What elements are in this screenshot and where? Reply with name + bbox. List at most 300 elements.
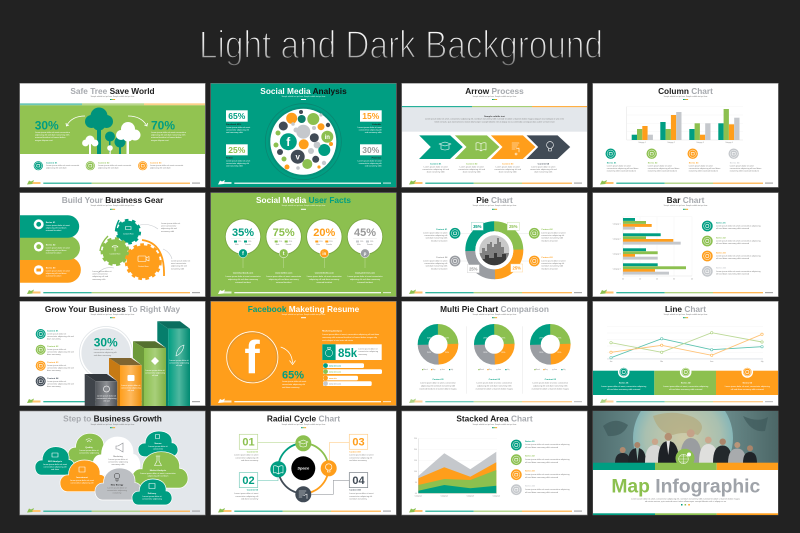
arrow captions: consectetur adipiscing elit sed xyxy=(458,168,485,171)
arrow captions: diam nonummy nibh xyxy=(427,172,445,174)
side contents: Lorem ipsum dolor sit amet xyxy=(541,259,566,262)
cover title: Map Infographic xyxy=(611,476,761,497)
3d column: green: consectetur adipiscing xyxy=(145,372,165,374)
series legend: Series 02 xyxy=(648,162,658,164)
slide: Social Media User Facts: Sample subtitle text put here. Sample subtitle text put here xyxy=(282,204,325,207)
column chart: Category 4 xyxy=(725,141,733,144)
marketing analysis text: nonummy nibh euismod tincidunt ut laoreet dolore magna aliq xyxy=(322,336,377,339)
title: Light and Dark Background xyxy=(199,24,603,67)
stacked area chart: 5.0 xyxy=(415,482,417,484)
3d column: teal: elit sed xyxy=(176,364,182,367)
slide: Bar Chart: Sample subtitle text put here. Sample subtitle text put here xyxy=(664,204,707,207)
series legend: elit sed diam nonummy nibh euismod xyxy=(525,491,558,494)
list items: Content 03 xyxy=(47,361,59,364)
gear arcs xyxy=(100,220,164,276)
cloud: Marketing: nonummy nibh xyxy=(111,464,125,466)
line chart: Jan xyxy=(610,361,612,363)
slide: Pie Chart xyxy=(402,193,587,297)
fact: 75%: 25% xyxy=(279,241,283,243)
donut 1 xyxy=(419,329,458,391)
side contents: consectetur adipiscing elit xyxy=(541,262,565,265)
stat: 65% xyxy=(226,110,251,134)
series legend: Lorem ipsum dolor sit amet consectetur adipiscing xyxy=(716,224,760,228)
fact: 35%: adipiscing elit sed diam nonummy xyxy=(228,278,258,281)
series legend: Lorem ipsum dolor sit amet consectetur adipiscing xyxy=(716,240,760,242)
donut 3: March xyxy=(536,368,540,371)
cover subtitle: Lorem ipsum dolor sit amet, consectetur adipiscing elit, sed diam nonummy nibh euismod tincidunt ut laoreet dolore magna xyxy=(631,498,741,501)
item 01: Lorem ipsum dolor sit amet xyxy=(234,454,259,456)
bar chart: 4.0 xyxy=(691,278,693,280)
stacked area chart: 0.0 xyxy=(415,493,417,495)
series legend: elit sed diam nonummy nibh euismod xyxy=(525,446,558,449)
gear captions: Lorem ipsum dolor sit xyxy=(161,222,181,225)
fact: 75%: adipiscing elit sed diam nonummy xyxy=(269,278,299,281)
stat: 15%: LinkedIn xyxy=(372,124,382,126)
arrow captions: Content 04 xyxy=(538,162,550,166)
donut 3: July xyxy=(563,369,566,371)
series legend xyxy=(606,148,762,172)
stat: 15%: consectetur adipiscing elit xyxy=(359,128,382,131)
fact: 20%: www.linkedin.com xyxy=(315,272,334,274)
green panel with trees: Lorem ipsum dolor sit amet consectetur xyxy=(35,131,70,134)
arrow captions: Content 03 xyxy=(502,162,514,166)
item 04 xyxy=(349,473,374,500)
color bands xyxy=(593,463,778,515)
left stacked bands: Lorem ipsum dolor sit amet xyxy=(46,246,70,250)
fact: 45%: www.pinterest.com xyxy=(355,272,375,274)
donut 3: Lorem ipsum dolor sit amet, consectetur xyxy=(533,382,568,385)
cycle ring xyxy=(270,435,337,502)
icon: trees xyxy=(82,108,140,154)
item 02 xyxy=(234,473,259,500)
photo: globe and business people xyxy=(593,411,778,463)
slide: Stacked Area Chart xyxy=(402,411,587,515)
contents row: adipiscing elit sed diam xyxy=(150,167,171,170)
donut 2: 20% xyxy=(483,352,488,354)
gray text band: Lorem ipsum dolor sit amet, consectetur adipiscing elit, sed diam nonummy nibh euismod tincidunt ut laoreet dolore magna aliquam erat volutpat ut wisi enim xyxy=(425,118,564,120)
85k box xyxy=(322,344,382,360)
marketing analysis text: Marketing Analysis xyxy=(322,330,343,332)
stat: 65%: 65% xyxy=(228,111,246,121)
gears xyxy=(102,220,160,279)
list items xyxy=(36,329,74,388)
heading: Line Chart xyxy=(665,304,706,314)
fact: 75%: Male xyxy=(276,244,279,246)
series legend: elit sed diam nonummy nibh euismod xyxy=(525,461,558,464)
donut 3 xyxy=(532,329,570,391)
bar chart: Category 2 xyxy=(613,238,621,240)
series legend: Lorem ipsum dolor sit amet consectetur adipiscing xyxy=(525,488,569,491)
column chart: Category 1 xyxy=(638,141,646,144)
progress bars: www.site.com xyxy=(329,382,341,385)
stat: 25%: sed nonummy nibh xyxy=(226,165,243,167)
3d column: green: Lorem ipsum dolor sit xyxy=(145,369,165,372)
series bands: Lorem ipsum dolor sit amet, consectetur adipiscing xyxy=(663,385,708,388)
gear captions: nonummy nibh xyxy=(161,231,174,233)
bar chart: 3.0 xyxy=(673,278,675,280)
donut 1: 20% xyxy=(445,338,449,340)
side contents: sed diam nonummy nibh xyxy=(541,238,563,240)
series legend: Series 03 xyxy=(716,252,726,254)
donut 3: Content 03 xyxy=(545,378,557,381)
cloud: Market Analysis: Market Analysis xyxy=(150,469,167,472)
series bands: Series 02 xyxy=(681,382,691,384)
stat: 15%: Lorem ipsum dolor sit amet xyxy=(358,126,382,129)
item 04: 04 xyxy=(352,475,365,487)
item 01: sed diam nonummy xyxy=(241,460,258,462)
fact: 75% xyxy=(266,218,302,284)
cloud: Secure: Secure xyxy=(154,443,162,445)
series legend: Series 02 xyxy=(716,237,726,239)
side contents: Content 03 xyxy=(541,256,553,259)
bar chart: Category 1 xyxy=(613,222,621,226)
arrow captions: Content 02 xyxy=(466,162,478,166)
arrow captions: Lorem ipsum dolor sit amet xyxy=(496,165,520,168)
slide: Social Media Analysis: Sample subtitle text put here. Sample subtitle text put here xyxy=(282,95,325,98)
slide: Build Your Business Gear: Sample subtitle text put here. Sample subtitle text put here xyxy=(91,204,134,207)
item 03: sed diam nonummy xyxy=(349,460,367,462)
item 04: sed diam nonummy xyxy=(349,498,367,500)
left stacked bands: adipiscing elit sed diam xyxy=(46,272,67,275)
side contents: Content 01 xyxy=(436,228,448,231)
stat: 65%: Lorem ipsum dolor sit amet xyxy=(226,126,251,129)
left stacked bands: Series 03 xyxy=(46,268,56,270)
series bands: Series 01 xyxy=(619,382,629,384)
donut 3: 20% xyxy=(557,352,562,354)
stat: 25%: 25% xyxy=(228,145,246,155)
list items: Lorem ipsum dolor sit xyxy=(47,364,67,367)
donut 1: July xyxy=(450,369,453,371)
heading: Step to Business Growth xyxy=(63,414,162,424)
cloud: SEO Analysis: SEO Analysis xyxy=(48,460,63,463)
stat: 30%: sed nonummy nibh xyxy=(365,165,382,167)
donut 3: euismod tincidunt ut laoreet dolore magna xyxy=(532,388,570,391)
pie value tags: 25% xyxy=(469,266,478,271)
cloud: Investment xyxy=(60,460,107,492)
arrow chain xyxy=(418,135,571,159)
item 04: Content 04 xyxy=(349,489,361,492)
item 03: 03 xyxy=(352,437,365,449)
list items: Content 02 xyxy=(47,345,59,348)
fact: 20%: 20% xyxy=(313,227,336,239)
series legend: Lorem ipsum dolor sit amet xyxy=(607,164,631,167)
fact: 35%: f xyxy=(242,251,244,257)
series legend: elit sed diam nonummy nibh euismod xyxy=(716,227,749,230)
slide: Facebook Marketing Resume: Sample subtitle text put here. Sample subtitle text put here xyxy=(282,313,325,316)
side contents: consectetur adipiscing elit xyxy=(424,262,448,265)
series legend: Series 03 xyxy=(525,471,535,473)
contents row: adipiscing elit sed diam xyxy=(46,167,67,170)
arrow xyxy=(281,347,296,364)
gear captions: amet consectetur xyxy=(161,225,177,228)
pie value tags: 25% xyxy=(513,266,521,271)
slide: Grow Your Business To Right Way xyxy=(20,301,205,406)
cloud: Market Analysis: Lorem ipsum dolor sit amet, consectetur xyxy=(140,472,176,475)
fact: 35%: 25% xyxy=(238,241,242,243)
series legend: nonummy nibh euismod tincidunt xyxy=(648,169,677,172)
side contents: consectetur adipiscing elit xyxy=(424,234,448,237)
donut chart xyxy=(470,226,518,274)
cloud: SEO Analysis xyxy=(35,447,75,475)
green panel with trees xyxy=(20,105,205,154)
side contents: Lorem ipsum dolor sit amet xyxy=(423,259,448,262)
slide: Grow Your Business To Right Way: Sample subtitle text put here. Sample subtitle text put here xyxy=(91,313,134,316)
donut 2: Content 02 xyxy=(489,378,501,381)
left stacked bands: euismod tincidunt xyxy=(46,274,62,278)
bubble chart xyxy=(265,104,341,180)
cloud: Market Analysis: adipiscing elit sed diam xyxy=(148,474,169,478)
cover subtitle: ad minim veniam, quis nostrud exerci tation ullamcorper suscipit lobortis nisl ut aliquip ex ea xyxy=(645,500,727,503)
bubble chart: in xyxy=(325,135,330,141)
fact: 45%: Female xyxy=(367,244,373,246)
marketing analysis text xyxy=(322,330,379,342)
85k box: consectetur adipiscing xyxy=(358,350,378,353)
fact: 20% xyxy=(306,218,342,284)
heading: Social Media User Facts xyxy=(256,195,351,205)
3d column: orange: elit sed xyxy=(128,389,134,392)
3d column: green xyxy=(133,341,166,406)
3d column: orange xyxy=(109,358,142,406)
marketing analysis text: erat volutpat ut wisi enim ad minim xyxy=(322,339,353,342)
series bands: Lorem ipsum dolor sit amet, consectetur adipiscing xyxy=(725,385,770,388)
bubble chart: f xyxy=(286,135,291,149)
stacked area chart: 20.0 xyxy=(414,449,417,451)
slide: Pie Chart: Sample subtitle text put here. Sample subtitle text put here xyxy=(473,204,516,207)
donut 2: March xyxy=(480,368,484,371)
arrow captions: diam nonummy nibh xyxy=(463,172,481,174)
green panel with trees: euismod tincidunt ut laoreet dolore xyxy=(35,136,66,139)
30% circle: Lorem ipsum dolor sit xyxy=(94,348,113,351)
fact: 45%: adipiscing elit sed diam nonummy xyxy=(350,278,380,281)
arrow captions: Lorem ipsum dolor sit amet xyxy=(460,165,484,168)
cloud: Quality: Lorem ipsum dolor sit xyxy=(79,449,99,452)
85k box: 85k xyxy=(338,348,358,360)
left stacked bands: Series 01 xyxy=(46,222,56,224)
slide: Line Chart: Sample subtitle text put here. Sample subtitle text put here xyxy=(664,313,707,316)
cloud: Investment: consectetur adipiscing elit xyxy=(71,482,94,484)
series legend: Lorem ipsum dolor sit amet consectetur adipiscing xyxy=(716,270,760,273)
fact: 20%: 25% xyxy=(319,241,323,243)
slide: Social Media Analysis xyxy=(211,83,396,187)
item 01: Content 01 xyxy=(247,450,259,453)
slide: Multi Pie Chart Comparison: Sample subtitle text put here. Sample subtitle text put here xyxy=(473,313,516,316)
series bands: elit sed diam nonummy nibh euismod xyxy=(731,388,764,391)
item 02: 02 xyxy=(242,475,255,487)
series legend: elit sed diam nonummy nibh euismod xyxy=(716,257,749,260)
gear captions: Lorem ipsum dolor sit xyxy=(171,260,191,262)
stat: 25%: Lorem ipsum dolor sit amet xyxy=(226,160,251,162)
gray text band: Sample subtitle text xyxy=(484,115,505,118)
stacked area chart: Category 2 xyxy=(441,494,448,498)
arrow captions: consectetur adipiscing elit sed xyxy=(530,168,557,171)
series bands: Lorem ipsum dolor sit amet, consectetur adipiscing xyxy=(601,385,646,388)
heading: Safe Tree Save World xyxy=(70,86,155,96)
green panel with trees: 30% xyxy=(35,118,59,132)
stat: 25%: Twitter xyxy=(226,156,233,159)
cloud: New Energy: consectetur adipiscing xyxy=(107,489,127,492)
list items: Lorem ipsum dolor sit xyxy=(47,348,67,351)
side contents: tincidunt ut laoreet xyxy=(541,239,558,242)
connector lines xyxy=(460,233,529,261)
pager dots xyxy=(681,504,690,506)
progress bars: www.site xyxy=(329,377,337,380)
contents row xyxy=(34,161,184,170)
series legend: Lorem ipsum dolor sit amet consectetur adipiscing xyxy=(716,254,760,258)
stat: 15%: 15% xyxy=(362,111,380,121)
series bands xyxy=(593,366,778,395)
fact: 35%: www.facebook.com xyxy=(233,272,253,274)
list items: Content 04 xyxy=(47,377,59,380)
cloud: Secure: consectetur xyxy=(153,448,164,450)
series legend: nonummy nibh euismod tincidunt xyxy=(607,169,636,172)
gray text band: minim veniam, quis nostrud exerci tation ullamcorper suscipit lobortis nisl ut aliquip ex ea commodo consequat duis autem vel eum iriure xyxy=(434,120,556,123)
heading: Grow Your Business To Right Way xyxy=(45,304,181,314)
donut 1: Lorem ipsum dolor sit amet, consectetur xyxy=(420,382,456,385)
bar chart: 1.0 xyxy=(639,278,641,280)
green panel with trees: magna aliquam erat xyxy=(151,139,169,142)
85k box: nonummy xyxy=(358,354,367,356)
progress bars: www.site.com xyxy=(329,364,341,367)
arrow captions: Lorem ipsum dolor sit amet xyxy=(424,165,448,168)
series legend: elit sed diam nonummy nibh euismod xyxy=(525,476,558,479)
fact: 75%: euismod tincidunt xyxy=(276,281,292,284)
fact: 20%: adipiscing elit sed diam nonummy xyxy=(309,278,339,281)
stat: 25%: consectetur adipiscing elit xyxy=(226,162,249,165)
heading: Column Chart xyxy=(658,86,713,96)
green panel with trees: adipiscing elit sed diam nonummy nibh xyxy=(151,134,185,137)
series legend: consectetur adipiscing elit sed diam xyxy=(689,167,721,170)
65% stat: consectetur adipiscing elit xyxy=(282,383,305,386)
slide: Build Your Business Gear xyxy=(20,193,205,297)
heading: Pie Chart xyxy=(476,195,513,205)
stat: 30%: consectetur adipiscing elit xyxy=(359,162,382,165)
donut 1: 20% xyxy=(427,352,431,354)
3d column: dark: Lorem ipsum dolor sit xyxy=(97,394,116,398)
bar chart: Category 3 xyxy=(613,252,621,256)
donut 3: adipiscing elit sed diam nonummy nibh xyxy=(533,385,567,388)
30% circle: 30% xyxy=(94,335,118,349)
cloud: New Energy xyxy=(95,468,142,500)
85k box: Lorem ipsum dolor sit xyxy=(358,348,378,350)
series legend xyxy=(511,440,569,495)
gear captions: Lorem ipsum dolor sit xyxy=(92,270,112,273)
fact: 35%: 35% xyxy=(232,227,254,239)
item 01: 01 xyxy=(242,437,255,449)
donut 1: June xyxy=(442,369,445,371)
list items: consectetur adipiscing elit sed xyxy=(47,350,74,354)
left stacked bands xyxy=(20,215,81,283)
column chart: Category 2 xyxy=(667,141,675,144)
list items: consectetur adipiscing elit sed xyxy=(47,366,74,370)
green panel with trees: euismod tincidunt ut laoreet dolore xyxy=(151,136,182,139)
heading: Arrow Process xyxy=(465,86,524,96)
fact: 20%: Lorem ipsum dolor sit amet consectetur xyxy=(307,275,342,278)
series legend: Lorem ipsum dolor sit amet consectetur adipiscing xyxy=(525,443,569,446)
list items: Lorem ipsum dolor sit xyxy=(47,380,67,383)
cloud: Investment: Lorem ipsum dolor sit amet xyxy=(70,479,95,482)
3d column: green: elit sed xyxy=(152,374,158,377)
green panel with trees: magna aliquam erat xyxy=(35,139,53,142)
heading: Multi Pie Chart Comparison xyxy=(440,304,549,314)
stacked area chart: 25.0 xyxy=(414,438,417,440)
item 03: consectetur adipiscing elit xyxy=(349,456,373,459)
series legend: Series 01 xyxy=(716,222,726,224)
city photo xyxy=(479,235,510,268)
series legend: Series 04 xyxy=(730,162,740,164)
cycle ring: Space xyxy=(297,466,310,470)
cloud: New Energy: Lorem ipsum dolor sit xyxy=(107,486,127,490)
stacked area chart: 15.0 xyxy=(414,460,417,462)
bar chart: 2.0 xyxy=(656,278,658,280)
gear captions: nonummy nibh xyxy=(92,279,105,281)
list items: diam nonummy xyxy=(47,338,61,340)
arrow captions xyxy=(422,162,557,174)
cloud: SEO Analysis: sed diam xyxy=(51,469,59,471)
gear captions: adipiscing elit sed xyxy=(92,275,108,278)
item 04: consectetur adipiscing elit xyxy=(349,495,373,498)
gears: Content Here xyxy=(110,252,120,256)
left stacked bands: Series 02 xyxy=(46,244,56,246)
donut 2: July xyxy=(507,369,510,371)
fact: 75%: 25% xyxy=(289,241,293,243)
cloud: New Energy: nonummy xyxy=(113,492,121,494)
stacked area chart xyxy=(414,438,500,498)
line chart: June xyxy=(710,361,714,363)
stat: 30% xyxy=(358,144,382,167)
donut 3: June xyxy=(554,369,557,371)
slide: Radial Cycle Chart xyxy=(211,411,396,515)
cloud: Quality: Quality xyxy=(85,446,93,449)
side contents: Lorem ipsum dolor sit amet xyxy=(423,231,448,234)
fact: 20%: Female xyxy=(326,244,332,246)
bar chart: Category 4 xyxy=(613,268,621,270)
side contents: tincidunt ut laoreet xyxy=(431,267,448,270)
list items: diam nonummy xyxy=(47,370,61,372)
slide: Bar Chart xyxy=(593,193,778,297)
cloud: SEO Analysis: Lorem ipsum dolor sit amet xyxy=(43,463,68,466)
series legend: consectetur adipiscing elit sed diam xyxy=(607,167,639,170)
donut 2: May xyxy=(489,369,492,371)
donut 3: 20% xyxy=(539,352,544,354)
fact: 20%: in xyxy=(322,251,327,256)
stacked area chart: 10.0 xyxy=(414,471,417,473)
stat: 25% xyxy=(226,144,251,167)
connectors xyxy=(258,443,349,494)
arrow captions: Content 01 xyxy=(430,162,442,166)
item 03: Content 03 xyxy=(349,450,361,453)
slide: Step to Business Growth: Sample subtitle text put here. Sample subtitle text put here xyxy=(91,423,134,426)
slide: Column Chart: Sample subtitle text put here. Sample subtitle text put here xyxy=(664,95,707,98)
65% stat xyxy=(282,370,307,389)
series legend: Series 01 xyxy=(607,162,617,164)
pie value tags: 25% xyxy=(509,224,518,229)
contents row: Lorem ipsum dolor sit amet consectet xyxy=(98,164,132,167)
65% stat: Lorem ipsum dolor sit amet xyxy=(282,380,307,383)
fact: 45%: p xyxy=(364,251,367,256)
series legend: Lorem ipsum dolor sit amet xyxy=(730,164,754,167)
cloud: Marketing: consectetur adipiscing xyxy=(108,460,128,464)
donut 2 xyxy=(476,329,514,391)
slide: Arrow Process xyxy=(402,83,587,187)
series bands: elit sed diam nonummy nibh euismod xyxy=(607,388,640,391)
3d column: teal xyxy=(157,321,190,406)
arrow captions: diam nonummy nibh xyxy=(534,172,552,174)
3d column: teal: Lorem ipsum dolor sit xyxy=(169,359,189,362)
donut 2: euismod tincidunt ut laoreet dolore magna xyxy=(476,388,514,391)
cloud: Marketing: Marketing xyxy=(113,455,124,458)
fact: 20%: 25% xyxy=(329,241,333,243)
slide: Radial Cycle Chart: Sample subtitle text put here. Sample subtitle text put here xyxy=(282,423,325,426)
